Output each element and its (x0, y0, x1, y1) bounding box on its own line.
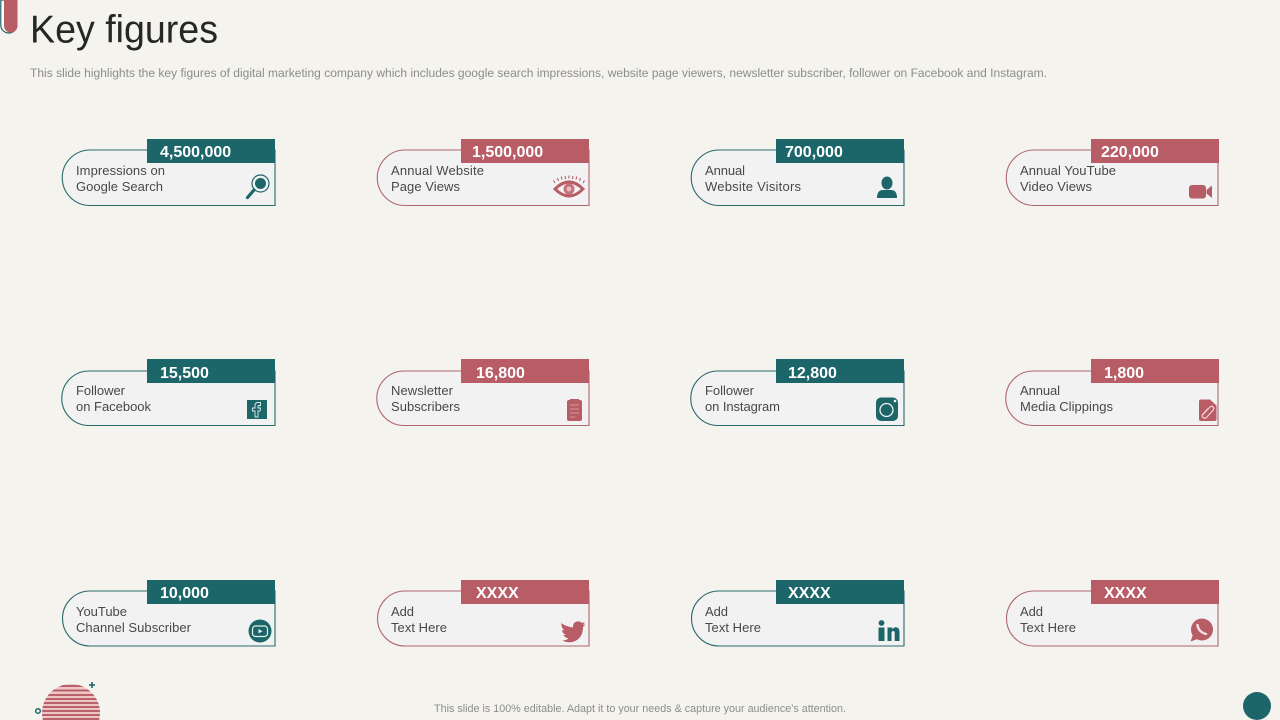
label: Video Views (1020, 179, 1092, 194)
label: Annual (1020, 383, 1060, 398)
label: Text Here (705, 620, 761, 635)
card: annual media clippings (1006, 359, 1219, 426)
icon: magnifier (248, 175, 269, 198)
label: Media Clippings (1020, 399, 1114, 414)
value: XXXX (788, 585, 831, 602)
page number dot (1243, 692, 1271, 720)
value: 700,000 (785, 144, 843, 161)
label: Impressions on (76, 163, 165, 178)
label: Add (705, 604, 728, 619)
title: Key figures (30, 8, 218, 52)
icon: video camera (1189, 185, 1212, 198)
value: 220,000 (1101, 144, 1159, 161)
value: 1,500,000 (472, 144, 543, 161)
card: YouTube channel subscriber (62, 580, 275, 646)
icon: person (877, 176, 897, 198)
label: Follower (76, 383, 126, 398)
card: follower on Facebook (62, 359, 275, 426)
label: Follower (705, 383, 755, 398)
card: follower on Instagram (691, 359, 904, 426)
icon: WhatsApp (1190, 618, 1213, 642)
icon: eye (554, 176, 584, 196)
label: Subscribers (391, 399, 460, 414)
label: Add (1020, 604, 1043, 619)
label: Text Here (391, 620, 447, 635)
label: YouTube (76, 604, 127, 619)
footer note: This slide is 100% editable. Adapt it to your needs & capture your audience's attention. (434, 703, 846, 715)
card: annual website visitors (691, 139, 904, 206)
label: Add (391, 604, 414, 619)
label: Text Here (1020, 620, 1076, 635)
label: Annual (705, 163, 745, 178)
subtitle: This slide highlights the key figures of digital marketing company which includes google search impressions, website page viewers, newsletter subscriber, follower on Facebook and Instagram. (30, 66, 1047, 80)
card: add text, Twitter (377, 580, 589, 646)
icon: LinkedIn (878, 620, 899, 641)
icon: Facebook (247, 400, 267, 419)
label: Google Search (76, 179, 163, 194)
icon: Twitter bird (561, 621, 586, 642)
label: Annual YouTube (1020, 163, 1116, 178)
icon: YouTube (248, 620, 272, 642)
value: 1,800 (1104, 365, 1144, 382)
card: add text, LinkedIn (692, 580, 904, 646)
corner bookmark decoration (1, 0, 18, 33)
card: add text, WhatsApp (1006, 580, 1219, 646)
value: 16,800 (476, 365, 525, 382)
value: 12,800 (788, 365, 837, 382)
icon: Instagram (876, 398, 898, 421)
value: 10,000 (160, 585, 209, 602)
card: annual YouTube video views (1006, 139, 1219, 206)
card: annual website page views (377, 139, 589, 206)
value: 4,500,000 (160, 144, 231, 161)
label: Page Views (391, 179, 460, 194)
card: newsletter subscribers (377, 359, 589, 426)
label: Newsletter (391, 383, 454, 398)
label: on Instagram (705, 399, 780, 414)
label: Annual Website (391, 163, 484, 178)
decoration: striped circle (36, 682, 102, 720)
value: XXXX (1104, 585, 1147, 602)
icon: clipboard (567, 399, 582, 421)
card: impressions on Google Search (62, 139, 275, 206)
label: Website Visitors (705, 179, 802, 194)
value: 15,500 (160, 365, 209, 382)
label: on Facebook (76, 399, 152, 414)
icon: paperclip document (1199, 400, 1216, 421)
value: XXXX (476, 585, 519, 602)
label: Channel Subscriber (76, 620, 192, 635)
